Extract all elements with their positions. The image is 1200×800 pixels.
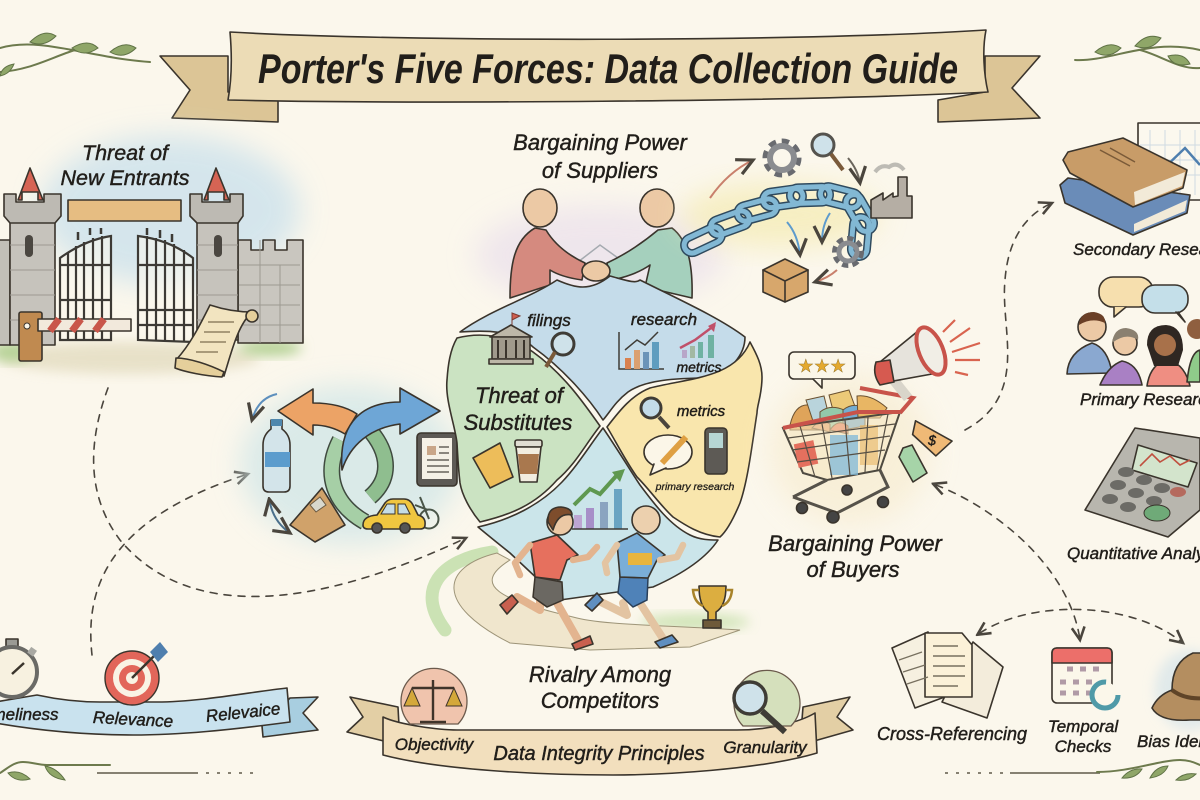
blue arrow (342, 388, 440, 470)
orange arrow (278, 389, 357, 435)
rivalry section: Competitors (541, 688, 659, 713)
heading: Bargaining Power (768, 531, 943, 556)
shopping cart (783, 388, 913, 523)
icon: bar chart (619, 332, 664, 369)
heading: threat of substitutes: Threat of (475, 383, 566, 408)
text labels: Objectivity (395, 735, 475, 754)
chart behind books (1138, 123, 1200, 200)
data integrity ribbon: Data Integrity Principles (493, 743, 705, 765)
timeliness ribbon: Relevance (92, 708, 174, 731)
ribbon tail (262, 697, 318, 737)
ribbon body (0, 688, 290, 735)
bicycle (415, 497, 438, 528)
label: metrics right: metrics (677, 403, 726, 420)
watercolor wash (40, 135, 300, 285)
icon: scales (401, 668, 467, 724)
tablet (417, 433, 457, 486)
suppliers section (475, 130, 725, 305)
bias identification panel (1137, 650, 1200, 751)
people (1067, 343, 1112, 374)
barrier (19, 312, 42, 361)
dashed arrows: right side (936, 203, 1183, 643)
small arrows (252, 394, 277, 420)
buyers section (768, 320, 980, 582)
supplier chain (680, 134, 912, 302)
groceries (790, 390, 887, 434)
icon: target (105, 642, 168, 705)
sign board (68, 200, 181, 221)
documents (892, 632, 950, 708)
light blue segment: rivalry (478, 428, 718, 600)
right ribbon tail (938, 56, 1040, 122)
chain links (681, 184, 877, 258)
heading: Threat of (82, 141, 170, 165)
label: research: research (631, 310, 697, 329)
scroll (175, 305, 258, 377)
rating bubble (789, 352, 855, 388)
icon: yellow book (473, 443, 513, 488)
timeliness ribbon (0, 639, 318, 737)
banner body (228, 30, 988, 102)
vine: bottom left (0, 762, 257, 780)
quantitative analysis panel (1067, 428, 1200, 563)
blue segment: filings and research (460, 276, 745, 420)
central five forces shield: Substitutes (464, 410, 572, 435)
icon: speech bubble with pencil (644, 435, 692, 475)
icon: rising chart (572, 469, 628, 529)
screen (1132, 445, 1197, 487)
runner two (585, 506, 683, 648)
heading: Bargaining Power (513, 130, 688, 155)
brown book (1063, 138, 1187, 207)
icon: metrics chart (680, 322, 716, 358)
left tower (4, 168, 61, 345)
rivalry section (432, 506, 750, 713)
icon: magnifier on grid (734, 670, 800, 732)
mountain sketch (578, 245, 618, 262)
handshake (582, 261, 610, 281)
yellow segment: metrics and primary research (607, 342, 762, 537)
vine: bottom right (945, 760, 1200, 780)
blue book (1060, 178, 1190, 235)
temporal checks panel: Checks (1055, 737, 1112, 756)
calendar (1052, 648, 1112, 703)
label: Temporal (1048, 717, 1119, 736)
data integrity ribbon (347, 668, 853, 775)
icon: magnifier (546, 333, 574, 367)
gear icons (766, 142, 798, 174)
icon: metrics magnifier (641, 398, 669, 428)
icon: recorder (705, 428, 727, 474)
title text: Porter's Five Forces: Data Collection Guide (258, 45, 958, 92)
speech bubbles (1099, 277, 1153, 307)
vine: top left (0, 33, 150, 76)
taxi (363, 499, 425, 533)
label: Cross-Referencing (877, 724, 1027, 744)
green verge (432, 552, 492, 630)
label: metrics: metrics (676, 359, 722, 375)
ribbon body (383, 713, 817, 775)
label: primary research: primary research (655, 481, 735, 493)
green loop arrow (332, 428, 386, 522)
calculator body (1085, 428, 1200, 537)
factory (871, 177, 912, 218)
vine: top right (1075, 36, 1200, 68)
supplier figure right (607, 228, 692, 298)
dashed arrows: left side (91, 388, 466, 655)
gates (60, 228, 193, 342)
icon: coffee cup (515, 440, 542, 482)
label: filings: filings (527, 311, 571, 330)
primary research panel (1067, 277, 1200, 409)
box (763, 259, 808, 302)
price tags (910, 421, 954, 458)
substitutes arrows group (240, 385, 460, 545)
supplier figure left (510, 228, 585, 298)
suppliers section: of Suppliers (542, 158, 658, 183)
megaphone (875, 320, 980, 398)
keys (1102, 467, 1186, 520)
green segment: threat of substitutes (447, 335, 600, 522)
castle section: threat of new entrants (0, 135, 303, 377)
secondary research panel (1060, 123, 1200, 259)
title banner (160, 30, 1040, 122)
timeliness ribbon: Relevaice (205, 699, 281, 726)
data integrity ribbon: Granularity (723, 738, 808, 757)
central five forces shield (447, 276, 762, 600)
temporal checks panel (1048, 648, 1119, 756)
water bottle (263, 420, 290, 492)
buyers section: $ (927, 432, 936, 448)
ribbon tails (347, 697, 400, 745)
left ribbon tail (160, 56, 278, 122)
refresh circle (1092, 682, 1118, 708)
road (454, 553, 740, 650)
icon: bank (489, 313, 533, 364)
heading: Rivalry Among (529, 662, 672, 687)
right tower (190, 168, 243, 340)
wall (238, 240, 303, 343)
trophy (693, 586, 732, 628)
cross-referencing panel (877, 632, 1027, 744)
rating bubble: ★★★ (798, 356, 846, 376)
icon: stopwatch (0, 639, 37, 697)
detective hat (1152, 653, 1200, 720)
magnifier (812, 134, 834, 156)
castle section: threat of new entrants: New Entrants (60, 166, 190, 190)
buyers section: of Buyers (807, 557, 899, 582)
flow arrows (710, 160, 753, 198)
runner one (500, 507, 597, 650)
book (290, 488, 345, 542)
